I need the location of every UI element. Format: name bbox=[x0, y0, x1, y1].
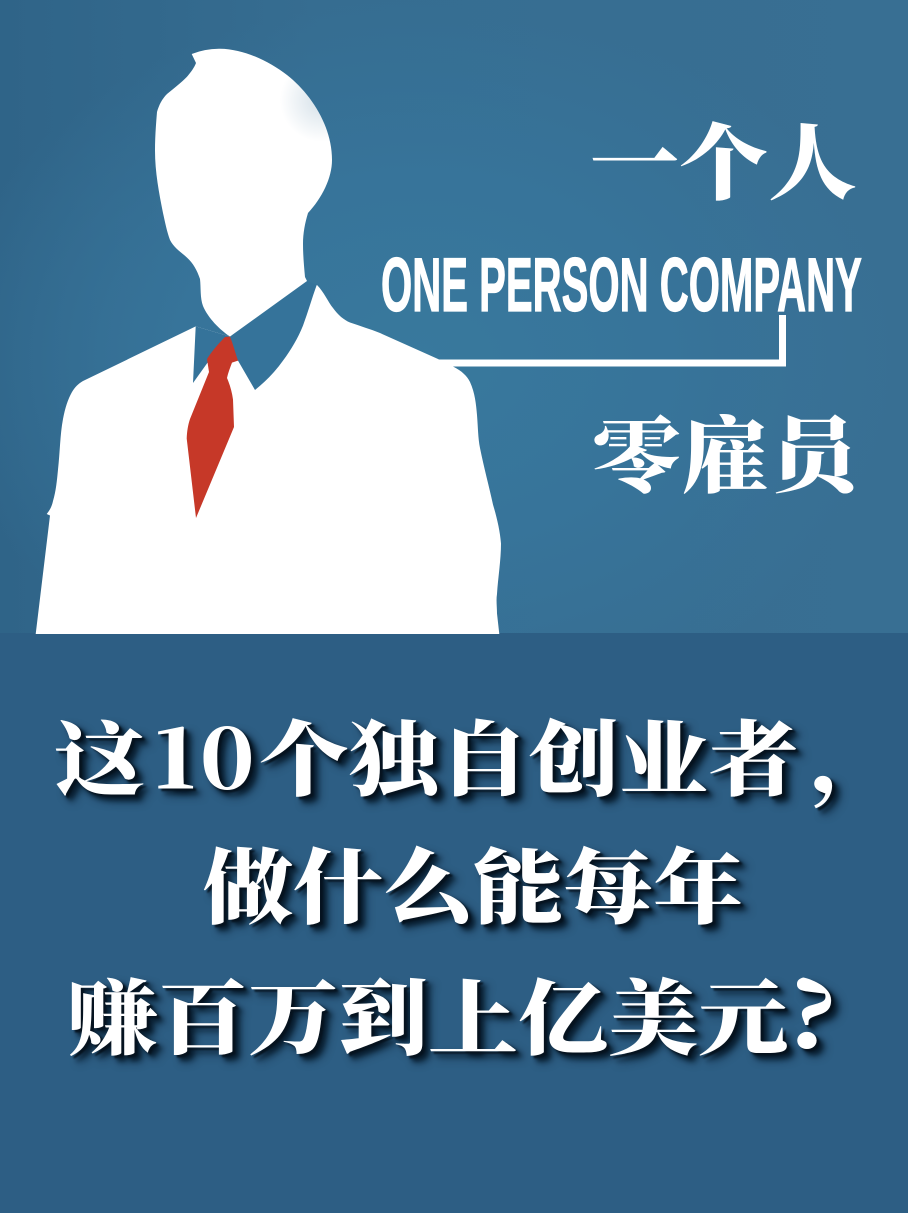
panel: top illustration background bbox=[0, 0, 908, 633]
heading: ONE PERSON COMPANY: ONE PERSON COMPANY bbox=[381, 243, 862, 328]
connector line from silhouette to label bbox=[439, 315, 786, 366]
red tie bbox=[187, 336, 238, 518]
illustration: businessman silhouette bbox=[36, 48, 501, 634]
head bbox=[155, 49, 332, 336]
heading: zero employees: 零雇员 bbox=[592, 391, 859, 509]
body bbox=[36, 285, 501, 634]
collar bbox=[193, 281, 317, 390]
headline line 2: 做什么能每年 bbox=[203, 822, 743, 940]
headline line 3: 赚百万到上亿美元? bbox=[68, 943, 837, 1074]
panel: bottom headline background bbox=[0, 634, 908, 1213]
heading: one person: 一个人 bbox=[590, 98, 857, 216]
headline line 1: 这10个独自创业者， bbox=[55, 694, 901, 812]
